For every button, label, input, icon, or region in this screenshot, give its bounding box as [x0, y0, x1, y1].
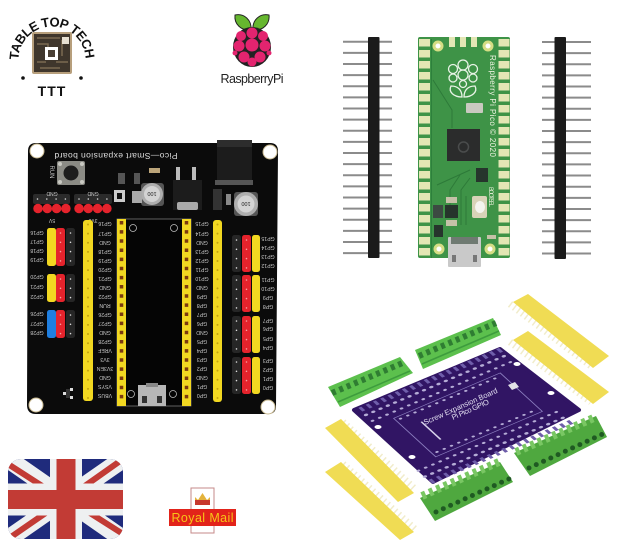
capacitor left: 100 [147, 190, 157, 196]
pin labels left of socket: 3V3 [100, 356, 110, 362]
GND and 5V 3V3 labels: 5V [48, 217, 55, 223]
pin labels left of socket: GP17 [98, 230, 112, 236]
outer right labels: GP8 [263, 303, 273, 309]
edge pads [424, 39, 504, 258]
outer right labels [261, 235, 275, 390]
GP15 to GP12 headers [232, 235, 260, 272]
outer left labels: GP16 [30, 229, 44, 235]
pin labels left of socket: VBUS [97, 392, 112, 398]
crown [195, 493, 210, 505]
outer right labels: GP7 [263, 317, 273, 323]
GP11 to GP8 headers [232, 275, 260, 312]
RUN label: RUN [48, 166, 54, 178]
silkscreen name: Raspberry Pi Pico © 2020 [488, 55, 497, 158]
pin labels right of socket: GP11 [195, 266, 208, 272]
GND and 5V 3V3 labels: GND [87, 190, 99, 196]
pin labels right of socket: GP3 [197, 356, 207, 362]
green terminal bottom left [420, 461, 513, 521]
pin labels right of socket: GP7 [197, 311, 207, 317]
raspberry leaves [235, 15, 269, 30]
pin labels right of socket: GP8 [197, 302, 207, 308]
board title: Pico—Smart expansion board [54, 151, 178, 161]
capacitor left [141, 183, 164, 206]
outer left labels: GP26 [30, 310, 44, 316]
yellow header top right 2 [510, 331, 609, 404]
GP7 to GP4 headers [232, 316, 260, 353]
logo: Raspberry Pi [220, 15, 284, 86]
pin labels left of socket: GND [99, 374, 111, 380]
pin labels right of socket: GP15 [195, 220, 209, 226]
pin labels right of socket: GP9 [197, 293, 207, 299]
GP20 to GP22 headers [47, 274, 75, 302]
outer right labels: GP6 [263, 325, 273, 331]
small components [114, 168, 231, 210]
pin labels right of socket: GP14 [195, 230, 209, 236]
board body [27, 143, 278, 414]
pin labels left of socket: GP16 [98, 220, 112, 226]
outer left labels: GP27 [30, 320, 44, 326]
Raspberry Pi silkscreen logo [448, 60, 478, 97]
outer right labels: GP12 [261, 262, 275, 268]
PCB mounting holes [374, 362, 554, 459]
pin labels right of socket: GP10 [195, 275, 209, 281]
pin labels left of socket: GP18 [98, 248, 112, 254]
capacitor right [234, 192, 258, 216]
pin labels right of socket: GND [196, 374, 208, 380]
pin labels left of socket: GP21 [98, 275, 112, 281]
PCB USB marking [508, 382, 519, 390]
pin labels right of socket: GP5 [197, 338, 207, 344]
outer right labels: GP15 [261, 235, 275, 241]
PCB silkscreen and pads [354, 349, 579, 482]
PCB title line 1: Screw Expansion Board [422, 386, 499, 427]
pin labels left of socket: GP20 [98, 266, 112, 272]
top red headers [38, 204, 108, 213]
outer right labels: GP3 [263, 357, 273, 363]
outer right labels: GP9 [263, 294, 273, 300]
GP3 to GP0 headers [232, 357, 260, 394]
outer right labels: GP14 [261, 244, 275, 250]
pin labels left of socket: GND [99, 284, 111, 290]
flash and power chips [433, 168, 488, 237]
socket circles [128, 224, 178, 398]
pin labels right of socket [195, 220, 209, 398]
yellow header top right 1 [510, 294, 609, 368]
outer right labels: GP4 [263, 344, 273, 350]
small switch component [63, 388, 73, 399]
raspberry fruit [232, 27, 272, 67]
micro USB socket [138, 383, 166, 406]
BOOTSEL button [472, 196, 487, 218]
outer right labels: GP13 [261, 253, 275, 259]
outer left labels: GP19 [30, 256, 44, 262]
outer left labels: GP20 [30, 273, 44, 279]
icon: chip [32, 32, 72, 74]
logo dots [21, 76, 83, 80]
outer right labels: GP2 [263, 366, 273, 372]
red band with name: Royal Mail [172, 511, 234, 525]
PCB title line 2: Pi Pico GPIO [450, 397, 490, 422]
pin labels right of socket: GND [196, 239, 208, 245]
right header groups [232, 235, 260, 394]
pin labels left of socket: GND [99, 239, 111, 245]
DC power jack [215, 140, 253, 185]
GND and 5V 3V3 labels [46, 190, 99, 223]
outer left labels: GP22 [30, 293, 44, 299]
panel: Screw expansion board kit [325, 294, 609, 540]
top pads [449, 37, 477, 47]
logo arc heading: TABLE TOP TECH [9, 18, 94, 60]
logo TTT: TTT [38, 83, 66, 99]
pin labels left of socket: GP27 [98, 320, 112, 326]
socket right strip [182, 219, 191, 406]
top black headers [33, 194, 112, 208]
panel: Raspberry Pi Pico with pin headers [368, 37, 566, 267]
long yellow header left [83, 220, 93, 401]
logo: Royal Mail [169, 488, 236, 533]
pin labels left of socket: GP22 [98, 293, 112, 299]
pin header left [368, 37, 380, 258]
board traces [433, 80, 470, 225]
crystal [466, 103, 483, 113]
pin labels left of socket: VSYS [98, 383, 112, 389]
right group pin dots [236, 240, 246, 392]
green terminal bottom right [514, 416, 607, 476]
outer right labels: GP0 [263, 384, 273, 390]
pin labels left of socket: RUN [99, 302, 111, 308]
reset button [57, 161, 85, 185]
pin labels left of socket: GP28 [98, 338, 112, 344]
BOOTSEL label: BOOTSEL [487, 187, 493, 208]
Pico PCB [418, 37, 510, 258]
panel: Pico Smart expansion board [27, 140, 278, 414]
outer right labels: GP11 [261, 276, 274, 282]
outer right labels: GP10 [261, 285, 275, 291]
pin labels left of socket: VREF [98, 347, 112, 353]
capacitor right: 100 [241, 200, 251, 206]
pin labels left of socket [97, 220, 113, 398]
corner holes [434, 42, 494, 253]
yellow header bottom left 1 [325, 419, 416, 502]
brand name: RaspberryPi [220, 72, 284, 86]
GND and 5V 3V3 labels: 3V3 [88, 217, 97, 223]
small inductors [446, 197, 496, 239]
pin labels right of socket: GP0 [197, 392, 207, 398]
logo: Table Top Tech [9, 18, 94, 99]
pin labels left of socket: GP26 [98, 311, 112, 317]
regulator [173, 167, 202, 210]
outer left labels [30, 229, 44, 335]
long yellow header right [213, 220, 222, 402]
left group pin dots [60, 233, 70, 336]
RP2040 chip [447, 129, 480, 161]
GP26 to GP28 headers [47, 310, 75, 338]
socket left strip [117, 219, 126, 406]
green terminal top left [328, 357, 413, 407]
pin labels right of socket: GND [196, 284, 208, 290]
outer left labels: GP21 [30, 283, 44, 289]
pin labels right of socket: GP2 [197, 365, 207, 371]
pin labels right of socket: GP13 [195, 248, 209, 254]
mounting holes [29, 144, 277, 414]
outer left labels: GP17 [30, 238, 44, 244]
pin header right [554, 37, 566, 259]
pin labels right of socket: GP6 [197, 320, 207, 326]
pin labels right of socket: GP12 [195, 257, 209, 263]
pin labels left of socket: GP19 [98, 257, 112, 263]
outer left labels: GP18 [30, 247, 44, 253]
pin labels right of socket: GP1 [197, 383, 207, 389]
pin labels right of socket: GP4 [197, 347, 207, 353]
purple PCB [354, 349, 579, 482]
icon: UK flag [8, 459, 123, 539]
pin labels left of socket: GND [99, 329, 111, 335]
outer right labels: GP1 [263, 375, 273, 381]
pin labels right of socket: GND [196, 329, 208, 335]
outer right labels: GP5 [263, 335, 273, 341]
Pico socket outline [117, 219, 191, 406]
outer left labels: GP28 [30, 329, 44, 335]
left header groups [47, 228, 75, 338]
yellow header bottom left 2 [325, 462, 416, 540]
GND and 5V 3V3 labels: GND [46, 190, 58, 196]
green terminal top right [415, 318, 501, 369]
micro USB connector [448, 237, 481, 267]
pin labels left of socket: 3V3EN [97, 365, 113, 371]
cross outline [191, 488, 214, 533]
GP16 to GP19 headers [47, 228, 75, 266]
